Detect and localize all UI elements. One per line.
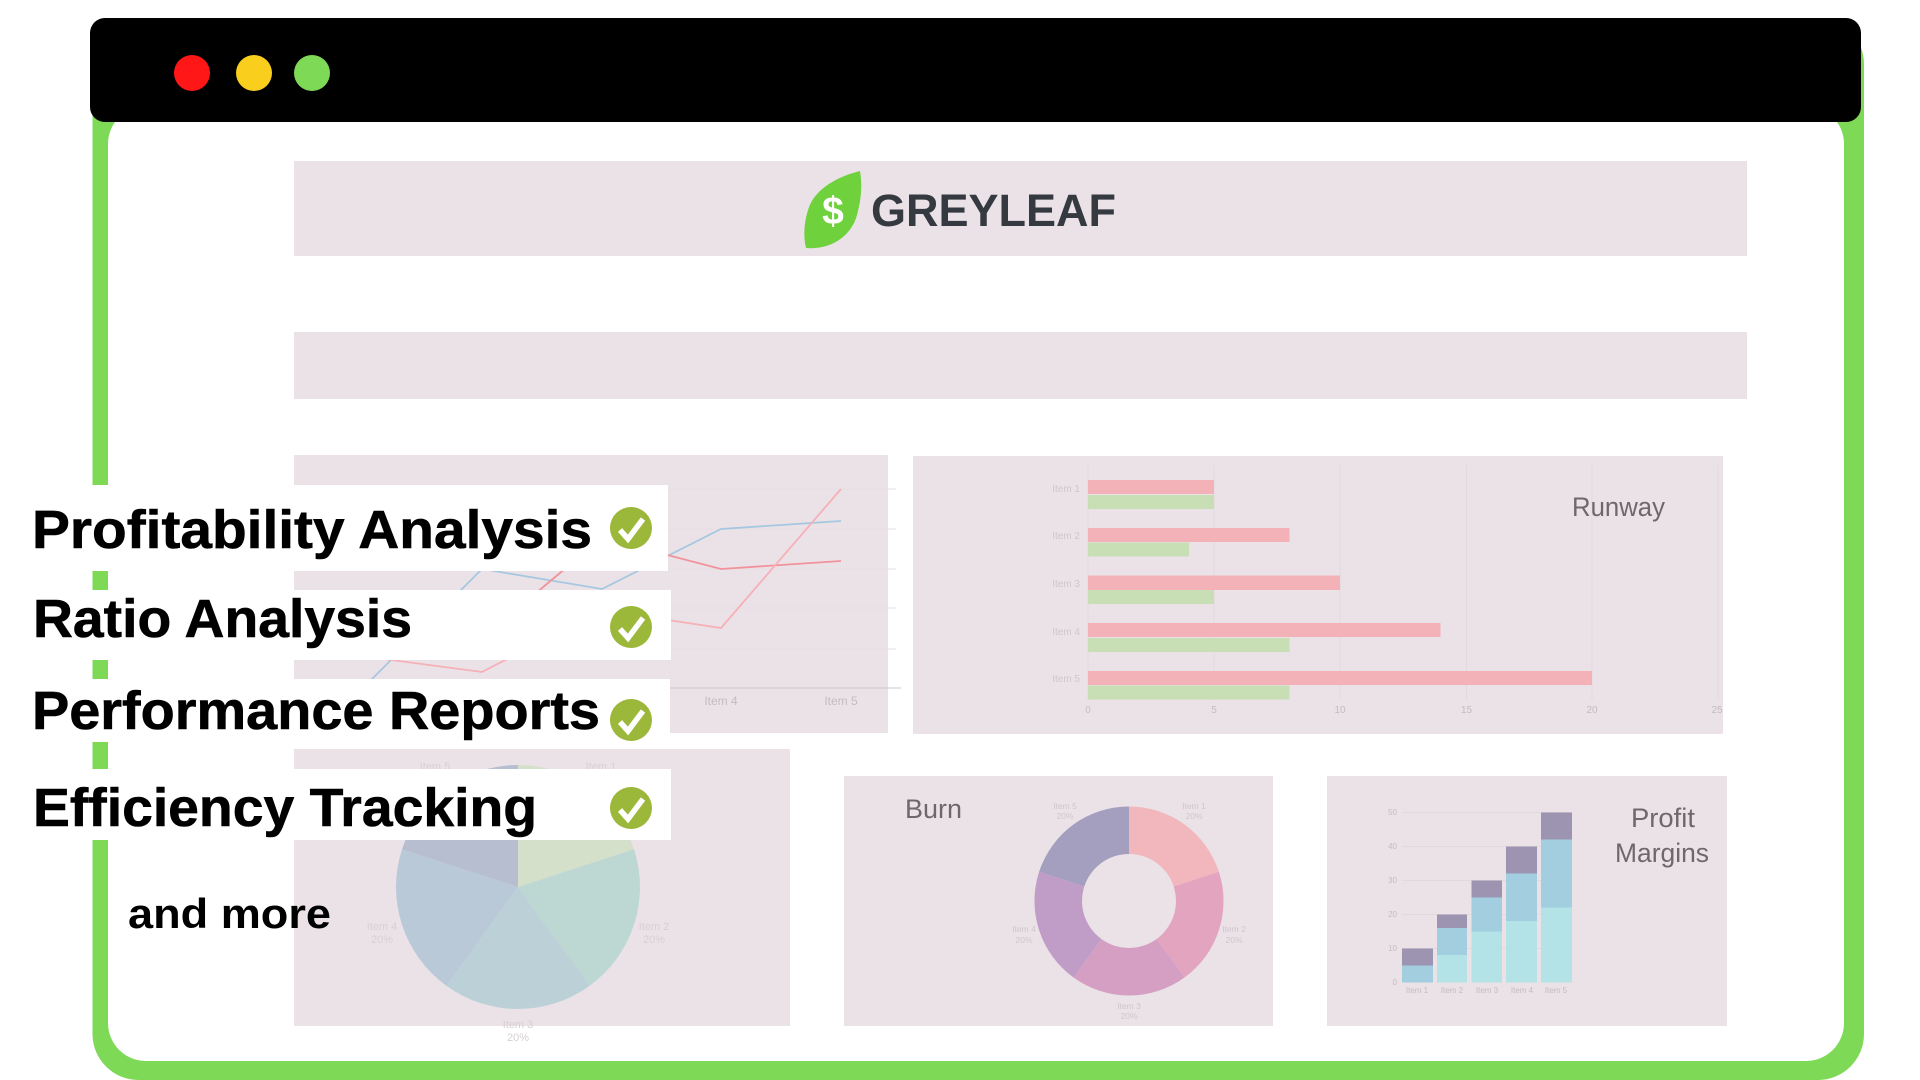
- bar axis numbers: 20: [1586, 705, 1598, 716]
- stack x axis: Item 1: [1406, 986, 1429, 995]
- stack x axis: Item 3: [1476, 986, 1499, 995]
- feature item: Profitability Analysis: [0, 485, 668, 571]
- pie labels: Item 3: [503, 1019, 533, 1031]
- stack y axis: 50: [1388, 808, 1398, 817]
- panel: runway bar chart: [913, 456, 1723, 734]
- icon: check: [610, 606, 652, 648]
- pie labels: Item 4: [367, 921, 397, 933]
- bar item labels: Item 2: [1052, 531, 1080, 542]
- bar axis numbers: 5: [1211, 705, 1217, 716]
- pie slices: [396, 765, 640, 1009]
- icon: leaf with dollar: [804, 171, 861, 248]
- chart title: Burn: Burn: [905, 794, 962, 824]
- bar axis numbers: 15: [1461, 705, 1472, 716]
- feature item: Ratio Analysis: [0, 589, 671, 660]
- feature item: Performance Reports: Performance Reports: [32, 681, 600, 741]
- donut labels: 20%: [1120, 1011, 1138, 1021]
- stack y axis: 40: [1388, 842, 1398, 851]
- bar item labels: Item 5: [1052, 674, 1080, 685]
- chart title: Runway: Runway: [1572, 492, 1665, 522]
- donut labels: Item 1: [1182, 801, 1206, 811]
- window control: red: [174, 55, 210, 91]
- icon: check: [610, 507, 652, 549]
- window control: green: [294, 55, 330, 91]
- pie labels: Item 1: [586, 761, 616, 773]
- donut labels: 20%: [1185, 811, 1203, 821]
- stack x axis: Item 2: [1441, 986, 1464, 995]
- panel: burn donut chart: [844, 776, 1273, 1026]
- pie labels: 20%: [507, 1032, 529, 1044]
- line series: blue: [361, 521, 841, 690]
- x axis labels: [704, 694, 858, 708]
- feature item: Efficiency Tracking: Efficiency Tracking: [33, 778, 537, 838]
- bar axis numbers: 10: [1334, 705, 1346, 716]
- pie labels: Item 5: [420, 761, 450, 773]
- browser title bar: [90, 18, 1861, 122]
- chart title: Profit Margins: Margins: [1615, 838, 1709, 868]
- stack series: purple: [1402, 812, 1572, 966]
- stack y axis: 0: [1393, 978, 1398, 987]
- line series: red: [482, 538, 841, 638]
- panel: logo header: [294, 161, 1747, 256]
- stack y axis: 10: [1388, 944, 1398, 953]
- icon: check: [610, 787, 652, 829]
- logo wordmark: GREYLEAF: [871, 185, 1116, 236]
- panel: line chart: [294, 455, 901, 733]
- feature item: Profitability Analysis: Profitability Analysis: [32, 500, 592, 560]
- panel: pie chart: [294, 749, 790, 1044]
- stack y axis: 30: [1388, 876, 1398, 885]
- donut labels: 20%: [1225, 935, 1243, 945]
- x axis labels: Item 4: [704, 694, 738, 708]
- stack x axis: [1406, 986, 1568, 995]
- stack series: teal: [1437, 908, 1572, 982]
- bar axis numbers: 0: [1085, 705, 1091, 716]
- panel: profit margins stacked bar chart: [1327, 776, 1727, 1026]
- chart title: Profit Margins: Profit: [1631, 803, 1695, 833]
- window control: yellow: [236, 55, 272, 91]
- donut labels: Item 4: [1012, 924, 1036, 934]
- donut labels: [1012, 801, 1246, 1021]
- stack y axis: [1388, 808, 1398, 987]
- donut labels: Item 3: [1117, 1001, 1141, 1011]
- x axis labels: Item 5: [824, 694, 858, 708]
- stack y axis: 20: [1388, 910, 1398, 919]
- panel: blank banner: [294, 332, 1747, 399]
- icon: leaf with dollar: $: [822, 190, 844, 233]
- stack series: blue: [1402, 840, 1572, 982]
- green bars: [1088, 495, 1290, 700]
- donut labels: 20%: [1015, 935, 1033, 945]
- bar axis numbers: 25: [1711, 705, 1723, 716]
- icon: check: [610, 699, 652, 741]
- bar axis numbers: [1085, 705, 1723, 716]
- feature item: Efficiency Tracking: [0, 769, 671, 840]
- stack x axis: Item 5: [1545, 986, 1568, 995]
- pie labels: 20%: [371, 934, 393, 946]
- stack x axis: Item 4: [1511, 986, 1534, 995]
- bar item labels: Item 3: [1052, 579, 1080, 590]
- bar item labels: Item 4: [1052, 627, 1080, 638]
- pie labels: [367, 761, 669, 1044]
- pie labels: 20%: [643, 934, 665, 946]
- donut labels: 20%: [1056, 811, 1074, 821]
- feature item: Ratio Analysis: Ratio Analysis: [33, 589, 412, 649]
- text: and more: and more: [128, 890, 331, 937]
- line series: pink: [361, 489, 841, 672]
- chart title: Profit Margins: [1615, 803, 1709, 868]
- bar item labels: Item 1: [1052, 484, 1080, 495]
- bar item labels: [1052, 484, 1080, 685]
- donut segments: [1034, 806, 1224, 996]
- pie labels: Item 2: [639, 921, 669, 933]
- donut labels: Item 5: [1053, 801, 1077, 811]
- donut labels: Item 2: [1222, 924, 1246, 934]
- red bars: [1088, 480, 1592, 685]
